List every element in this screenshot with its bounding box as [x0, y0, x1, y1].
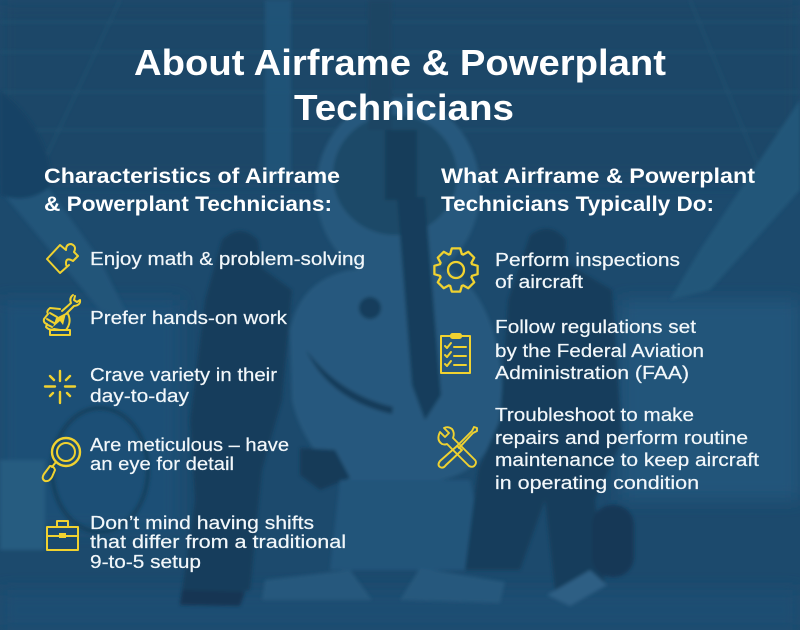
- title: About Airframe & Powerplant: [134, 42, 666, 83]
- text: shifts: that differ from a traditional: [90, 532, 346, 552]
- text: inspections: [495, 250, 680, 292]
- heading: what technicians do: What Airframe & Powerplant: [441, 165, 755, 188]
- icon: spark burst: [45, 371, 75, 403]
- heading: what technicians do: Technicians Typically Do:: [441, 193, 714, 216]
- text: shifts: Don’t mind having shifts: [90, 513, 314, 533]
- fuselage: [290, 270, 503, 480]
- icon: hand holding wrench: [44, 295, 80, 335]
- text: enjoy math: Enjoy math & problem-solving: [90, 249, 365, 269]
- text: troubleshoot: maintenance to keep aircraft: [495, 450, 759, 470]
- text: regulations: Administration (FAA): [495, 363, 689, 383]
- icon: crossed wrench and screwdriver: [438, 427, 477, 468]
- text: crave variety: [90, 365, 277, 406]
- text: meticulous: [90, 435, 289, 474]
- heading: what technicians do: [441, 165, 755, 216]
- lower fuselage dark section: [300, 448, 350, 490]
- cowl ring: [316, 98, 480, 282]
- text: troubleshoot: repairs and perform routine: [495, 428, 748, 448]
- hangar ceiling: [0, 0, 800, 170]
- title: [134, 42, 666, 128]
- text: troubleshoot: in operating condition: [495, 473, 699, 493]
- landing gear and wheel: [592, 505, 634, 577]
- text: regulations: by the Federal Aviation: [495, 341, 704, 361]
- text: shifts: 9-to-5 setup: [90, 552, 201, 572]
- wing right: [670, 100, 800, 300]
- text: inspections: of aircraft: [495, 272, 583, 292]
- heading: characteristics: Characteristics of Airframe: [44, 165, 340, 188]
- text: meticulous: an eye for detail: [90, 454, 234, 474]
- heading: characteristics: [44, 165, 340, 216]
- wing left: [0, 120, 130, 320]
- text: troubleshoot: Troubleshoot to make: [495, 405, 694, 425]
- icon: briefcase: [47, 521, 78, 550]
- text: hands-on: Prefer hands-on work: [90, 308, 288, 328]
- propeller: [397, 197, 441, 420]
- text: inspections: Perform inspections: [495, 250, 680, 270]
- icon: magnifying glass: [43, 438, 80, 481]
- text: troubleshoot: [495, 405, 759, 493]
- person left: [180, 231, 292, 605]
- text: meticulous: Are meticulous – have: [90, 435, 289, 455]
- icon: clipboard checklist: [441, 333, 470, 373]
- text: regulations: [495, 317, 704, 383]
- icon: puzzle piece: [47, 244, 78, 273]
- text: crave variety: day-to-day: [90, 386, 189, 406]
- text: crave variety: Crave variety in their: [90, 365, 277, 385]
- icon: gear: [434, 248, 478, 292]
- text: regulations: Follow regulations set: [495, 317, 696, 337]
- equipment left: [0, 460, 45, 550]
- person right: [465, 229, 622, 590]
- text: shifts: [90, 513, 346, 572]
- heading: characteristics: & Powerplant Technicians:: [44, 193, 332, 216]
- title: Technicians: [294, 87, 514, 128]
